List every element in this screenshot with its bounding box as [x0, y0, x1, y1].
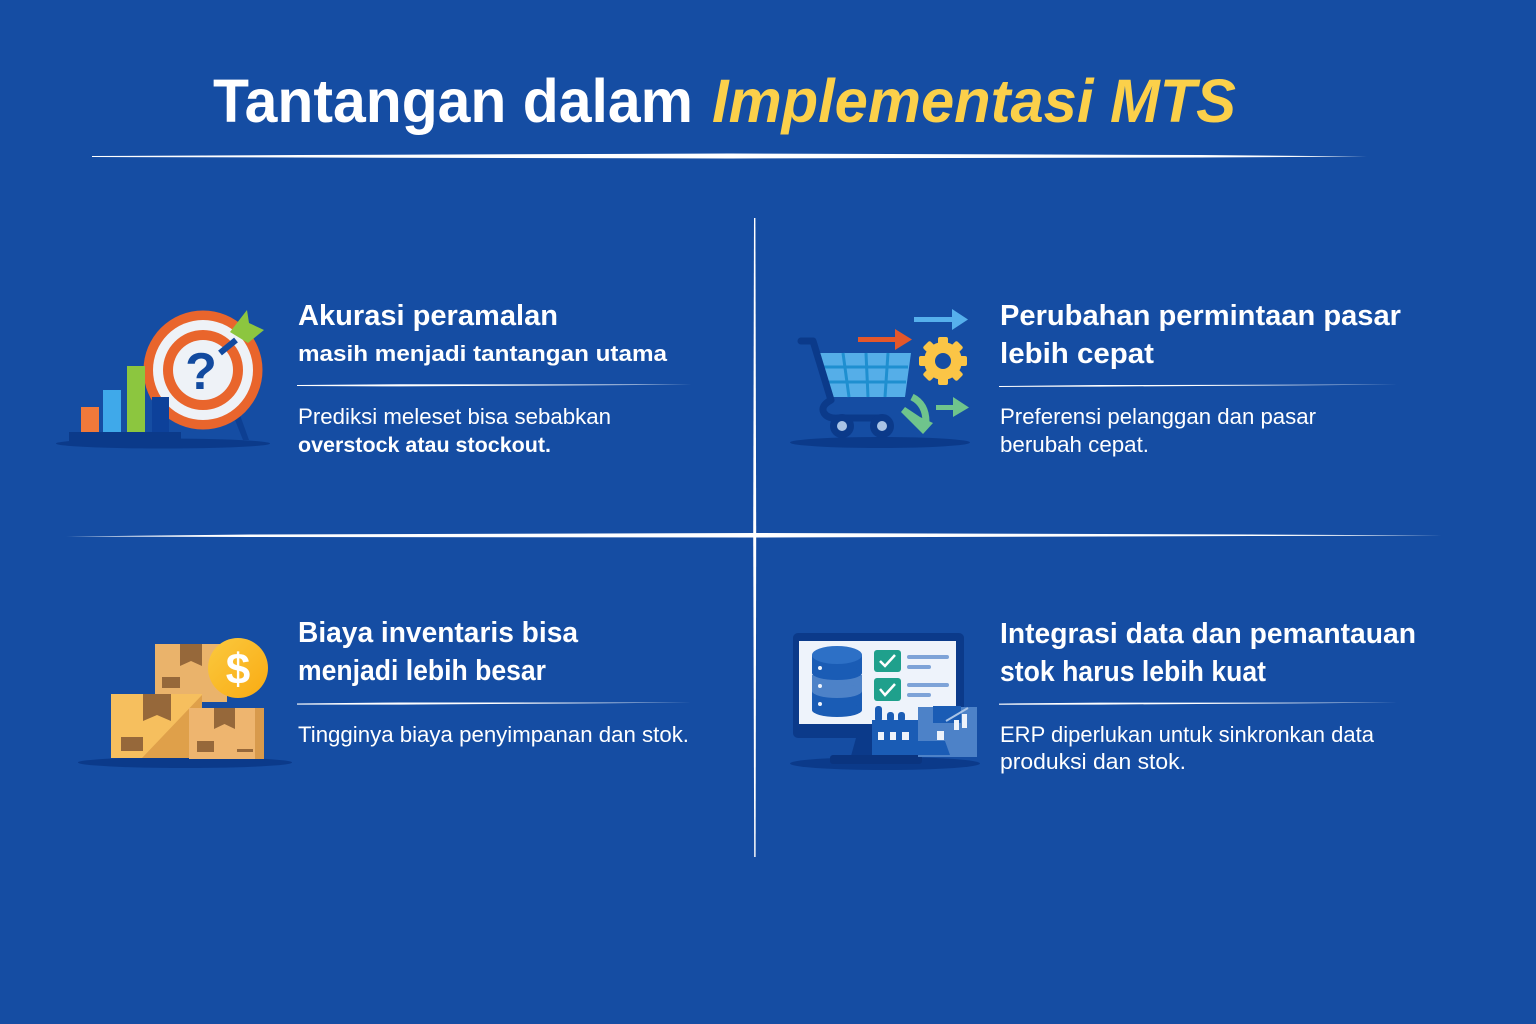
body text: Tingginya biaya penyimpanan dan stok.	[298, 722, 689, 747]
body text: Preferensi pelanggan dan pasar	[1000, 404, 1316, 429]
icon: shopping cart with arrows and gear	[790, 309, 970, 448]
title: Implementasi MTS	[712, 67, 1236, 135]
icon: boxes and coin: $	[226, 645, 250, 694]
panel: biaya inventaris	[78, 617, 692, 768]
body text: produksi dan stok.	[1000, 749, 1186, 774]
heading: Perubahan permintaan pasar	[1000, 300, 1401, 332]
body text	[1000, 722, 1374, 774]
heading: Biaya inventaris bisa	[298, 617, 579, 649]
panel: integrasi data	[790, 618, 1416, 774]
heading: menjadi lebih besar	[298, 655, 546, 687]
heading: Integrasi data dan pemantauan	[1000, 618, 1416, 650]
heading	[298, 617, 579, 687]
subheading: masih menjadi tantangan utama	[298, 341, 668, 366]
body text: overstock atau stockout.	[298, 433, 551, 457]
body text: Prediksi meleset bisa sebabkan	[298, 404, 611, 429]
icon: monitor with database, checklist and factory	[790, 633, 980, 770]
icon: boxes and coin	[78, 638, 292, 768]
body text	[298, 404, 611, 457]
panel: perubahan permintaan	[790, 300, 1401, 457]
body text	[1000, 404, 1316, 457]
heading: stok harus lebih kuat	[1000, 656, 1266, 688]
heading: lebih cepat	[1000, 338, 1155, 370]
panel: akurasi peramalan	[56, 300, 692, 457]
heading	[1000, 618, 1416, 688]
icon: target and bar chart: ?	[185, 343, 217, 401]
heading	[1000, 300, 1401, 370]
body text: berubah cepat.	[1000, 432, 1149, 457]
title: Tantangan dalam	[213, 67, 693, 135]
heading: Akurasi peramalan	[298, 300, 558, 332]
title	[213, 67, 1236, 135]
icon: target and bar chart	[56, 310, 270, 448]
body text: ERP diperlukan untuk sinkronkan data	[1000, 722, 1374, 747]
